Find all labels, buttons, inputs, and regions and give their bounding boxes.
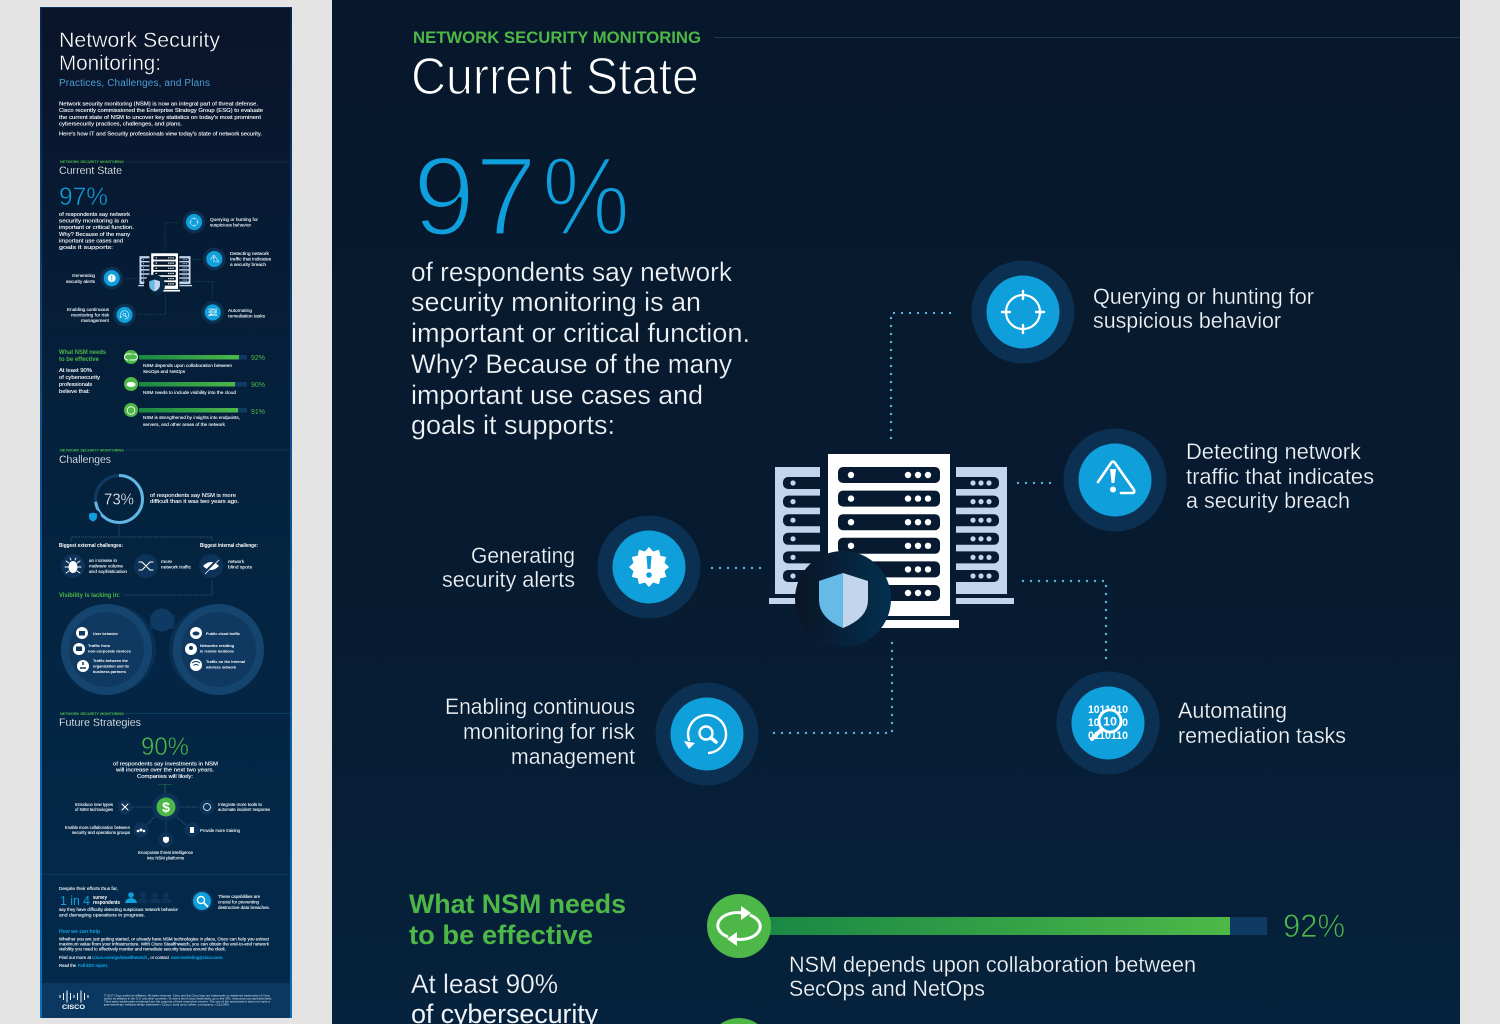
thumbnail visibility heading (59, 580, 212, 599)
big stat: 97 percent: 97 (413, 134, 537, 259)
binoculars right lens items: Traffic on the internal (206, 660, 245, 664)
big stat: 97 percent: % (542, 134, 630, 259)
future strategies labels: automate incident response (218, 807, 270, 813)
thumbnail bar: 90 percent: 90% (251, 382, 265, 389)
thumbnail bar: 91 percent: NSM is strengthened by insights into endpoints, (143, 415, 240, 421)
thumbnail: how we can help (59, 929, 270, 968)
future strategies labels (65, 802, 270, 862)
legal text (104, 994, 272, 1006)
thumbnail: what NSM needs: of cybersecurity (59, 375, 100, 381)
thumbnail: 1 in 4 statistic: survey (93, 895, 107, 901)
thumbnail intro text: Here's how IT and Security professionals view today's state of network security. (59, 132, 262, 138)
icon: binary magnifier: 10 (1103, 716, 1117, 728)
label: generating (442, 543, 575, 592)
thumbnail challenge items: more (161, 559, 172, 565)
icon: binary magnifier (1056, 672, 1160, 774)
intro paragraph: security monitoring is an (411, 287, 701, 317)
bar caption: NSM depends upon collaboration between (789, 952, 1196, 977)
Cisco logo: CISCO (62, 1004, 85, 1011)
binoculars left lens items: business partners (93, 670, 126, 674)
binoculars graphic (61, 604, 264, 695)
thumbnail: how we can help: cisco.com/go/stealthwatch (92, 955, 147, 960)
label: enabling (445, 694, 636, 769)
donut description: of respondents say NSM is more (150, 493, 237, 499)
thumbnail section: current state: Current State (59, 165, 122, 177)
current state paragraph: Why? Because of the many (59, 232, 130, 238)
thumbnail section: future strategies: NETWORK SECURITY MONITORING (60, 711, 124, 716)
label: generating: security alerts (442, 567, 575, 592)
thumbnail section: future strategies (59, 711, 290, 780)
thumbnail diagram labels (66, 217, 272, 324)
thumbnail bar: 92 percent: SecOps and NetOps (143, 369, 186, 375)
label: enabling: monitoring for risk (463, 719, 636, 744)
label: detecting: traffic that indicates (1186, 464, 1374, 489)
intro paragraph: important use cases and (411, 380, 703, 410)
thumbnail: how we can help: nsm-marketing@cisco.com. (171, 955, 223, 960)
thumbnail: 1 in 4 statistic (59, 886, 178, 918)
icon: binary magnifier: 1001010 (1088, 717, 1128, 729)
thumbnail bar: 91 percent (124, 403, 265, 428)
shield badge (795, 551, 891, 647)
thumbnail diagram labels: traffic that indicates (230, 256, 272, 262)
thumbnail: what NSM needs: to be effective (59, 357, 100, 363)
thumbnail connector (71, 525, 212, 541)
thumbnail use-case diagram (100, 211, 226, 326)
intro paragraph: of respondents say network (411, 257, 732, 287)
future strategies labels: Introduce new types (75, 802, 113, 808)
thumbnail: how we can help: , or contact (148, 955, 170, 960)
thumbnail section: future strategies: 90% (141, 733, 189, 761)
binoculars left lens items (73, 627, 131, 674)
thumbnail: 1 in 4 statistic: respondents (93, 900, 120, 906)
donut chart: 73 percent: 73% (104, 492, 134, 508)
future strategies labels: Integrate more tools to (218, 802, 262, 808)
future strategies labels: security and operations groups (72, 830, 130, 836)
binoculars left lens items: non-corporate devices (88, 650, 131, 654)
server rack illustration (769, 454, 1014, 647)
Cisco logo (60, 990, 88, 1011)
thumbnail intro text: the current state of NSM to uncover key statistics on today's most prominent (59, 115, 261, 121)
thumbnail bar: 91 percent: servers, and other areas of the network (143, 422, 226, 428)
thumbnail magnifier callout: crucial for preventing (218, 900, 259, 906)
thumbnail diagram labels: suspicious behavior (210, 222, 251, 228)
thumbnail challenge items: and sophistication (89, 569, 127, 575)
thumbnail: how we can help: Whether you are just getting started, or already have NSM technologies in place, Cisco can help you extract (59, 936, 270, 942)
thumbnail section: challenges: Challenges (59, 454, 111, 466)
current state paragraph: of respondents say network (59, 212, 130, 218)
thumbnail title: Practices, Challenges, and Plans (59, 78, 210, 89)
thumbnail: how we can help: Full ESG report. (78, 963, 108, 968)
thumbnail bar: 91 percent: 91% (251, 409, 265, 416)
thumbnail title: Monitoring: (59, 51, 161, 75)
thumbnail bar: 90 percent (124, 377, 265, 396)
thumbnail: what NSM needs: professionals (59, 382, 92, 388)
label: automating (1178, 698, 1346, 748)
binoculars left lens items: Traffic from (88, 644, 111, 648)
diagram labels (442, 284, 1374, 769)
thumbnail magnifier callout: These capabilities are (218, 894, 260, 900)
icon: loop arrows (707, 894, 771, 958)
legal text: © 2017 Cisco and/or its affiliates. All rights reserved. Cisco and the Cisco logo are trademarks or registered trademarks of Cisco (104, 994, 271, 998)
big stat: 97 percent (413, 134, 630, 259)
thumbnail intro text: cybersecurity practices, challenges, and plans. (59, 122, 182, 128)
thumbnail: what NSM needs: believe that: (59, 389, 90, 395)
label: enabling: Enabling continuous (445, 694, 635, 719)
thumbnail intro text: Cisco recently commissioned the Enterprise Strategy Group (ESG) to evaluate (59, 108, 264, 114)
legal text: partnership relationship between Cisco and any other company. (1110R) (104, 1002, 229, 1006)
donut description: difficult than it was two years ago. (150, 499, 239, 505)
thumbnail: 1 in 4 statistic: 1 in 4 (60, 893, 90, 908)
label: detecting: a security breach (1186, 488, 1350, 513)
thumbnail section: current state: NETWORK SECURITY MONITORING (60, 159, 124, 164)
thumbnail challenge items: malware volume (89, 564, 123, 570)
label: querying: suspicious behavior (1093, 308, 1281, 333)
thumbnail bar: 92 percent (124, 350, 265, 375)
thumbnail diagram labels: Enabling continuous (67, 307, 110, 313)
icon: alert badge (598, 516, 700, 618)
subheading: what NSM needs: to be effective (409, 920, 593, 950)
thumbnail: how we can help: Find out more at (59, 955, 92, 960)
future strategies labels: into NSM platforms (147, 856, 185, 862)
thumbnail: what NSM needs: At least 90% (59, 368, 93, 374)
thumbnail: 1 in 4 statistic: Despite their efforts thus far, (59, 886, 118, 892)
bar chart: 92 percent: 92% (1283, 908, 1345, 944)
thumbnail diagram labels: a security breach (230, 262, 266, 268)
icon: rotating magnifier (656, 682, 758, 786)
thumbnail section: future strategies: Future Strategies (59, 717, 141, 729)
icon: target (972, 260, 1074, 364)
legal text: Third-party trademarks mentioned are the property of their respective owners. The use of the word partner does not imply a (104, 1000, 271, 1004)
donut description (150, 493, 239, 505)
future strategies labels: Provide more training (200, 828, 240, 834)
intro paragraph (411, 257, 750, 440)
binoculars left lens items: User behavior (93, 632, 119, 636)
use-case diagram (598, 260, 1166, 786)
label: detecting (1186, 439, 1374, 513)
thumbnail challenge items (59, 543, 258, 578)
thumbnail magnifier callout: destructive data breaches. (218, 905, 270, 911)
thumbnail: how we can help: visibility you need to effectively monitor and remediate security issues around the clock. (59, 946, 226, 952)
thumbnail challenge items: network (228, 559, 245, 565)
thumbnail section: future strategies: Companies will likely: (137, 774, 193, 780)
thumbnail title (59, 28, 220, 89)
current state paragraph: goals it supports: (59, 245, 113, 251)
donut chart: 73 percent (85, 476, 142, 525)
label: automating: remediation tasks (1178, 723, 1346, 748)
future strategies labels: of NSM technologies (75, 807, 113, 813)
icon: binary magnifier: 1011010 (1088, 704, 1128, 716)
future strategies labels: Enable more collaboration between (65, 825, 130, 831)
thumbnail diagram labels: monitoring for risk (71, 312, 110, 318)
thumbnail challenge items: Biggest external challenges: (59, 543, 123, 549)
bar chart: 92 percent (707, 894, 1345, 1001)
thumbnail: 1 in 4 statistic: and damaging operations in progress. (59, 912, 145, 918)
label: querying: Querying or hunting for (1093, 284, 1314, 309)
thumbnail section: challenges: NETWORK SECURITY MONITORING (60, 448, 124, 452)
future strategies hub diagram: $ (162, 799, 170, 815)
thumbnail section: future strategies: of respondents say investments in NSM (113, 762, 218, 768)
thumbnail challenge items: an increase in (89, 558, 117, 564)
legal text: and/or its affiliates in the U.S. and other countries. To view a list of Cisco trademarks, go to this URL: www.cisco.com/go/trademarks. (104, 996, 272, 1000)
intro paragraph: Why? Because of the many (411, 349, 732, 379)
thumbnail section: future strategies: will increase over the next two years. (115, 768, 214, 774)
thumbnail intro text (59, 102, 264, 138)
thumbnail: how we can help: How we can help (59, 929, 101, 935)
label: querying (1093, 284, 1314, 333)
binoculars right lens items: wireless network (205, 666, 237, 670)
text: at least 90 percent: At least 90% (411, 969, 558, 999)
thumbnail: what NSM needs (59, 350, 107, 395)
thumbnail: how we can help: Read the (59, 963, 77, 968)
intro paragraph: important or critical function. (411, 318, 750, 348)
label: enabling: management (511, 744, 635, 769)
bar caption: SecOps and NetOps (789, 976, 985, 1001)
current state paragraph: security monitoring is an (59, 218, 128, 224)
thumbnail diagram labels: management (81, 318, 110, 324)
icon: binary magnifier: 0110110 (1088, 730, 1128, 742)
next bar icon peek (720, 1018, 758, 1024)
thumbnail: what NSM needs: What NSM needs (59, 350, 107, 356)
binoculars right lens items: in remote locations (200, 650, 234, 654)
thumbnail footer (42, 983, 290, 1018)
thumbnail: how we can help: maximum value from your infrastructure. With Cisco Stealthwatch, you can obtain the end-to-end network (59, 942, 270, 946)
thumbnail diagram labels: remediation tasks (228, 314, 266, 320)
future strategies labels: Incorporate threat intelligence (138, 850, 193, 856)
panel: page preview thumbnail (40, 7, 292, 1018)
thumbnail intro text: Network security monitoring (NSM) is now an integral part of threat defense. (59, 102, 258, 108)
binoculars right lens items: Networks residing (200, 644, 235, 648)
current state paragraph (59, 212, 134, 251)
thumbnail bar: 92 percent: NSM depends upon collaboration between (143, 363, 232, 369)
label: automating: Automating (1178, 698, 1287, 723)
thumbnail diagram labels: Querying or hunting for (210, 217, 258, 223)
panel: enlarged page detail (332, 0, 1460, 1024)
subheading: what NSM needs (409, 889, 626, 950)
thumbnail challenge items: blind spots (228, 564, 253, 570)
binoculars left lens items: Traffic between the (93, 659, 128, 663)
bar caption (789, 952, 1196, 1001)
thumbnail section: current state: 97% (59, 183, 108, 211)
thumbnail bar: 90 percent: NSM needs to include visibility into the cloud (143, 390, 236, 396)
thumbnail diagram labels: Automating (228, 308, 252, 314)
label: generating: Generating (471, 543, 575, 568)
current state paragraph: important use cases and (59, 238, 123, 244)
section eyebrow: NETWORK SECURITY MONITORING (413, 28, 701, 47)
future strategies hub diagram (118, 784, 214, 848)
binoculars left lens items: organization and its (93, 664, 129, 668)
thumbnail: 1 in 4 statistic: say they have difficulty detecting suspicious network behavior (59, 907, 178, 913)
thumbnail diagram labels: Detecting network (230, 251, 270, 257)
thumbnail visibility heading: Visibility is lacking in: (59, 593, 120, 599)
label: detecting: Detecting network (1186, 439, 1362, 464)
thumbnail magnifier callout (191, 890, 270, 912)
icon: warning triangle (1064, 428, 1166, 532)
thumbnail section: challenges (59, 448, 290, 466)
current state paragraph: important or critical function. (59, 225, 134, 231)
thumbnail title: Network Security (59, 28, 220, 52)
thumbnail bar: 92 percent: 92% (251, 355, 265, 362)
subheading: what NSM needs: What NSM needs (409, 889, 626, 919)
thumbnail challenge items: network traffic (161, 564, 192, 570)
binoculars right lens items (185, 627, 245, 671)
thumbnail diagram labels: Generating (72, 273, 95, 279)
binoculars right lens items: Public cloud traffic (206, 632, 240, 636)
heading: Current State (411, 48, 699, 106)
thumbnail diagram labels: security alerts (66, 279, 96, 285)
intro paragraph: goals it supports: (411, 410, 615, 440)
thumbnail challenge items: Biggest internal challenge: (200, 543, 258, 549)
thumbnail section: current state (59, 159, 290, 251)
